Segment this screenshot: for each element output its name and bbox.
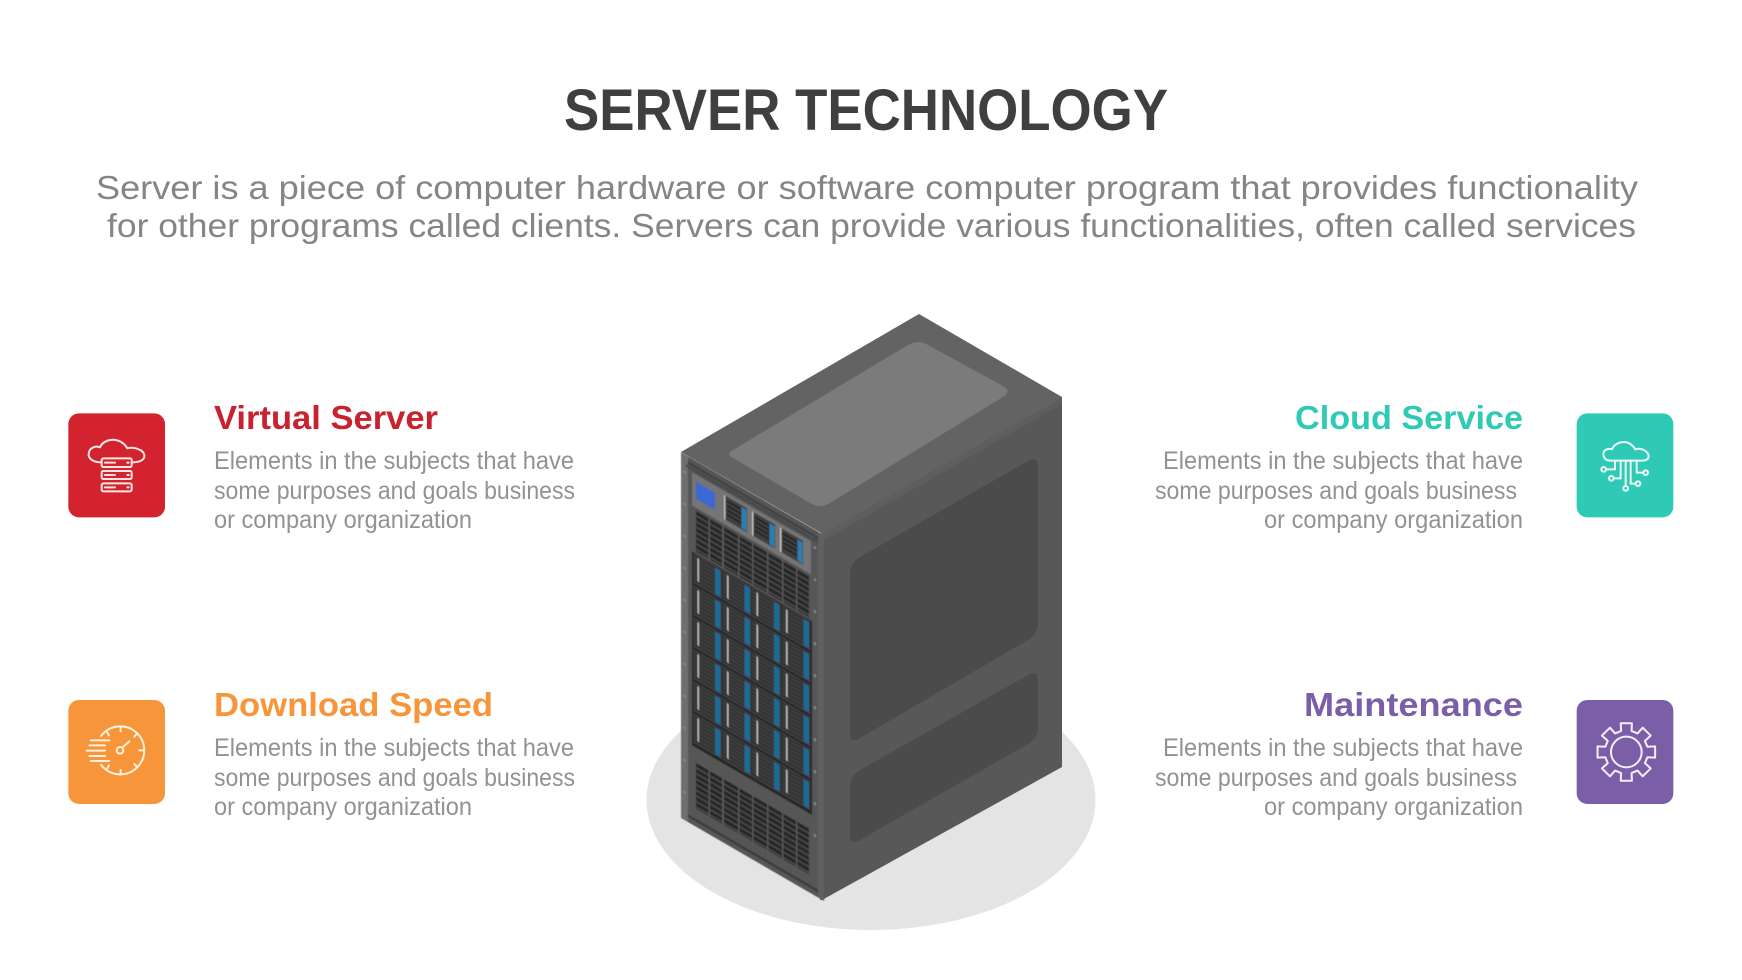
server right side xyxy=(820,397,1062,900)
body text: or company organization xyxy=(214,793,472,821)
floor shadow ellipse xyxy=(646,670,1096,930)
heading: Virtual Server xyxy=(214,399,438,436)
icon: speedometer xyxy=(68,700,165,804)
panel: virtual server xyxy=(68,399,575,534)
side panel small xyxy=(850,673,1038,842)
lower vent grille xyxy=(696,763,809,874)
body text: some purposes and goals business xyxy=(1155,764,1517,792)
body text: Elements in the subjects that have xyxy=(1163,447,1523,475)
server front face xyxy=(681,452,824,901)
icon: gear xyxy=(1577,700,1673,804)
body text: some purposes and goals business xyxy=(1155,477,1517,505)
panel: maintenance xyxy=(1155,686,1673,821)
upper vent grille xyxy=(696,510,809,617)
body text: Elements in the subjects that have xyxy=(1163,734,1523,762)
heading: Cloud Service xyxy=(1295,399,1523,436)
body text xyxy=(1155,447,1523,534)
panel: download speed xyxy=(68,686,575,821)
body text xyxy=(214,447,575,534)
body text: or company organization xyxy=(214,506,472,534)
subtitle description xyxy=(96,169,1639,244)
heading: Maintenance xyxy=(1304,686,1523,723)
side panel large xyxy=(850,459,1038,740)
body text: or company organization xyxy=(1264,793,1523,821)
body text: Elements in the subjects that have xyxy=(214,447,574,475)
icon: cloud network xyxy=(1577,413,1673,517)
blue display xyxy=(696,482,715,510)
heading: Download Speed xyxy=(214,686,493,723)
body text: some purposes and goals business xyxy=(214,764,575,792)
server top xyxy=(681,314,1062,534)
body text: or company organization xyxy=(1264,506,1523,534)
body text xyxy=(214,734,575,821)
icon: cloud server xyxy=(68,413,165,517)
subtitle description: for other programs called clients. Servers can provide various functionalities, often called services xyxy=(107,207,1636,244)
body text xyxy=(1155,734,1523,821)
drive bays xyxy=(724,495,747,532)
panel: cloud service xyxy=(1155,399,1673,534)
body text: some purposes and goals business xyxy=(214,477,575,505)
title: SERVER TECHNOLOGY xyxy=(564,78,1168,143)
server blade rows xyxy=(692,551,812,815)
top control strip xyxy=(692,472,811,574)
top lid xyxy=(729,342,1008,506)
subtitle description: Server is a piece of computer hardware or software computer program that provides functionality xyxy=(96,169,1639,206)
body text: Elements in the subjects that have xyxy=(214,734,574,762)
illustration: server rack on shadow xyxy=(646,314,1096,930)
rack screws xyxy=(683,470,816,870)
